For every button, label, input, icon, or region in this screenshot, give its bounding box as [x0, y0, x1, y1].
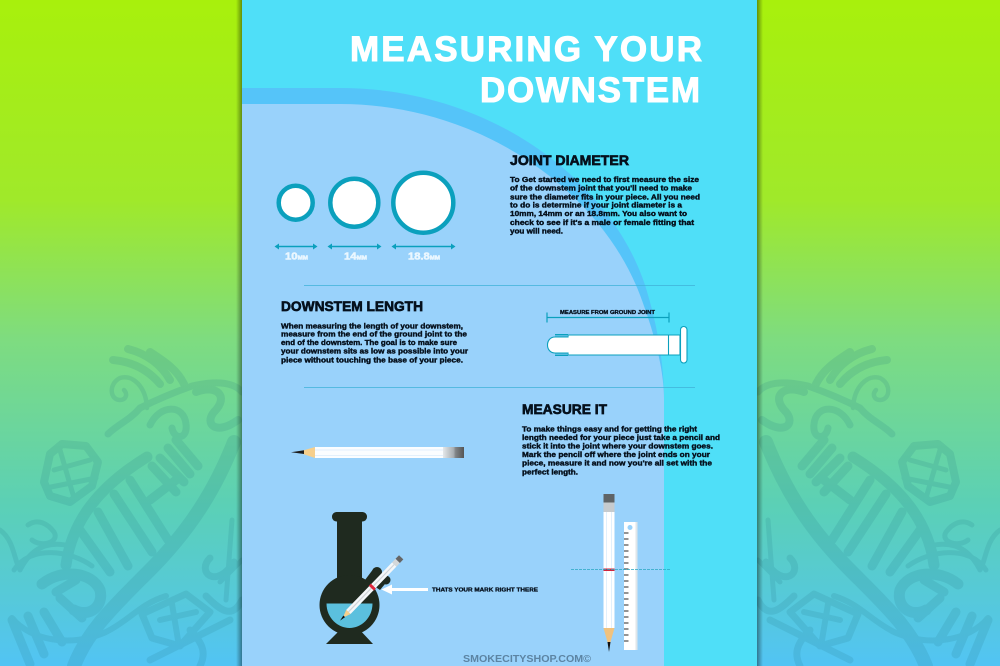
text: joint diameter — [510, 175, 700, 236]
title: DOWNSTEM — [480, 71, 700, 110]
text: measure it: perfect length. — [522, 468, 578, 476]
text: measure it — [522, 424, 720, 476]
icon: ruler — [624, 522, 638, 650]
text: downstem length: piece without touching the base of your piece. — [281, 356, 463, 364]
text: measure it: stick it into the joint where your downstem goes. — [522, 442, 713, 450]
heading: joint diameter: JOINT DIAMETER — [510, 152, 629, 168]
size arrows and labels — [274, 244, 456, 262]
measure bar — [547, 310, 669, 322]
size arrows and labels: 18.8 MM — [408, 252, 440, 262]
size arrows and labels: 10 MM — [285, 252, 308, 262]
text: mark label: THATS YOUR MARK RIGHT THERE — [432, 588, 538, 594]
text: measure it: Mark the pencil off where the joint ends on your — [522, 450, 710, 459]
text: downstem length: end of the downstem. The goal is to make sure — [281, 338, 457, 347]
panel shadows — [236, 0, 763, 666]
text: joint diameter: you will need. — [510, 226, 563, 236]
light blue area — [242, 104, 664, 666]
text: joint diameter: of the downstem joint that you'll need to make — [510, 184, 692, 192]
heading: measure it: MEASURE IT — [522, 401, 607, 417]
text: joint diameter: to do is determine if your joint diameter is a — [510, 200, 683, 210]
title: MEASURING YOUR — [350, 30, 702, 69]
divider — [304, 386, 695, 388]
text: downstem length: measure from the end of the ground joint to the — [281, 330, 467, 338]
text: joint diameter: sure the diameter fits in your piece. All you need — [510, 192, 700, 202]
title — [350, 30, 702, 110]
text: downstem length: When measuring the length of your downstem, — [281, 322, 463, 330]
dashed mark line — [571, 568, 670, 570]
icon: horizontal pencil — [291, 447, 464, 458]
downstem illustration — [548, 326, 687, 363]
curved band — [242, 88, 664, 420]
icon: bong with pencil — [320, 512, 404, 644]
divider — [304, 284, 695, 286]
text: joint diameter: To Get started we need to first measure the size — [510, 175, 699, 184]
joint size circles — [279, 173, 453, 233]
text: joint diameter: check to see if it's a male or female fitting that — [510, 218, 695, 227]
size arrows and labels: 14 MM — [344, 252, 367, 262]
main panel — [242, 0, 757, 666]
heading: downstem length: DOWNSTEM LENGTH — [281, 298, 423, 314]
icon: vertical pencil — [604, 494, 614, 652]
arrow: mark pointer — [382, 584, 428, 594]
text: downstem length — [281, 322, 468, 364]
left ornament watermark — [0, 349, 242, 666]
text: downstem length: your downstem sits as low as possible into your — [281, 346, 468, 356]
right ornament watermark — [758, 349, 1000, 666]
text: measure it: piece, measure it and now you're all set with the — [522, 458, 712, 468]
text: measure it: To make things easy and for getting the right — [522, 424, 698, 434]
text: measure it: length needed for your piece just take a pencil and — [522, 433, 720, 442]
measure bar: MEASURE FROM GROUND JOINT — [560, 310, 656, 316]
footer: SMOKECITYSHOP.COM© — [463, 654, 592, 665]
text: joint diameter: 10mm, 14mm or an 18.8mm. You also want to — [510, 209, 687, 218]
